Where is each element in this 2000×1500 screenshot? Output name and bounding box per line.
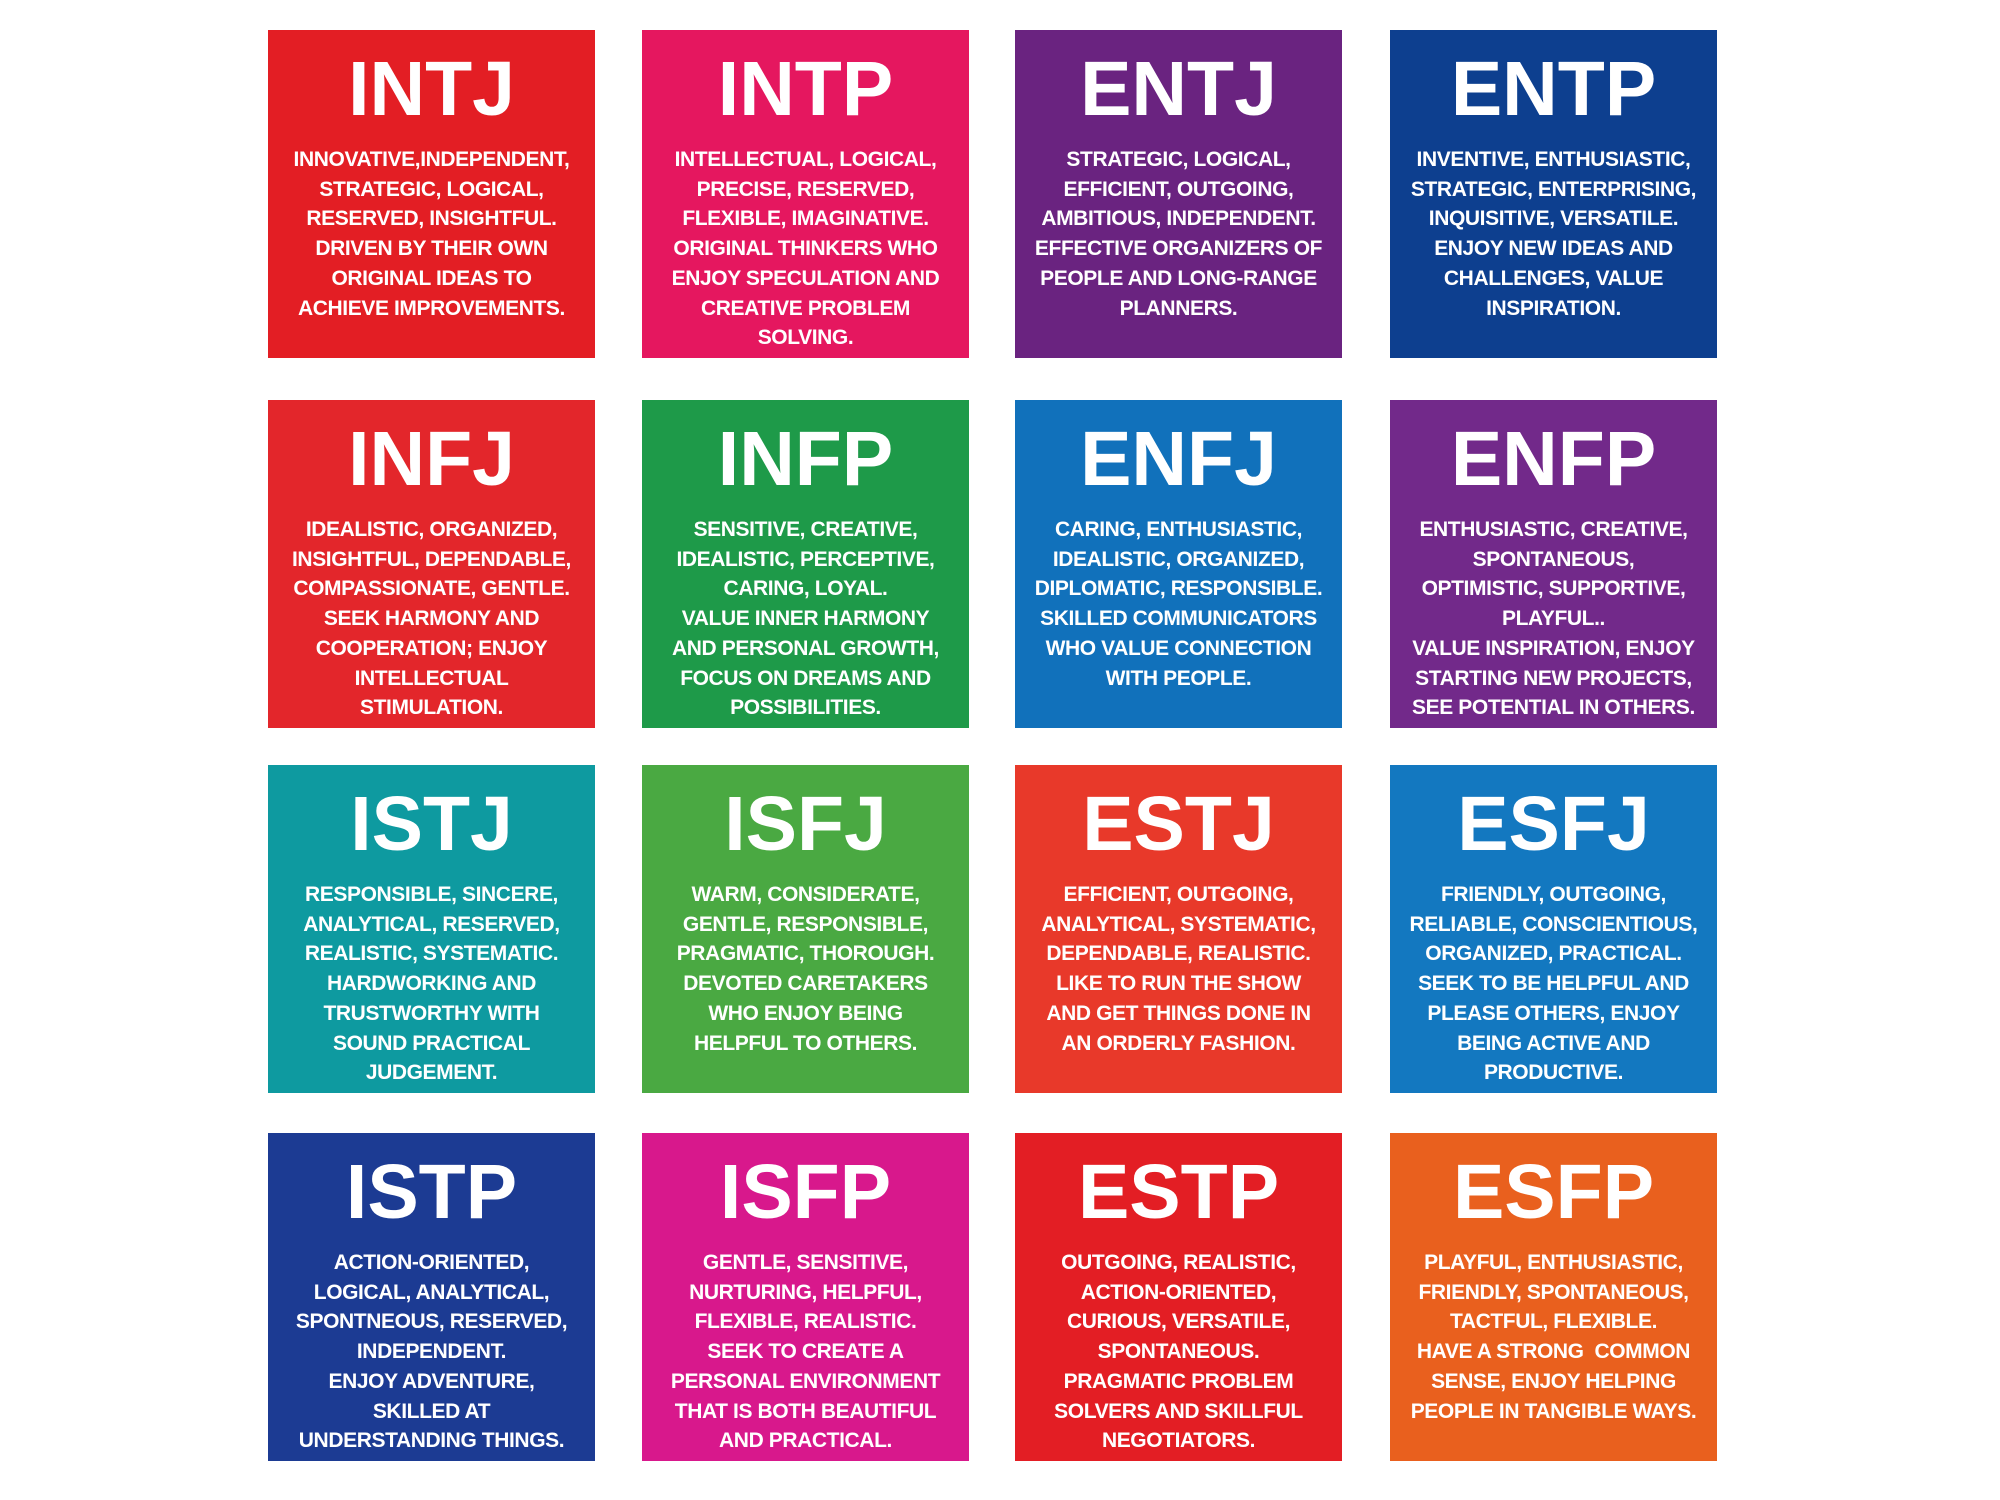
panel: INTP bbox=[642, 30, 969, 358]
heading: ISFP: ISFP bbox=[720, 1149, 891, 1235]
heading: ISTP: ISTP bbox=[346, 1149, 517, 1235]
text: ESTJ description: EFFICIENT, OUTGOING, bbox=[1063, 883, 1294, 906]
panel: ENFP bbox=[1390, 400, 1717, 728]
text: INTJ description: STRATEGIC, LOGICAL, bbox=[319, 178, 544, 201]
text: ISFJ description: GENTLE, RESPONSIBLE, bbox=[683, 913, 928, 936]
heading: ISTJ: ISTJ bbox=[350, 781, 513, 867]
text: ISTJ description: JUDGEMENT. bbox=[366, 1061, 497, 1084]
text: ISFJ description: WHO ENJOY BEING bbox=[708, 1002, 903, 1025]
text: INTP description: CREATIVE PROBLEM bbox=[701, 297, 910, 320]
text: ENTJ description: EFFICIENT, OUTGOING, bbox=[1063, 178, 1294, 201]
text: ESTP description bbox=[1054, 1251, 1303, 1452]
text: ESTJ description: LIKE TO RUN THE SHOW bbox=[1056, 972, 1301, 995]
text: ENFJ description: SKILLED COMMUNICATORS bbox=[1040, 607, 1317, 630]
text: INFP description: CARING, LOYAL. bbox=[724, 577, 887, 600]
text: ESTP description: NEGOTIATORS. bbox=[1102, 1429, 1255, 1452]
text: ISFP description: NURTURING, HELPFUL, bbox=[689, 1281, 922, 1304]
text: ISTJ description: ANALYTICAL, RESERVED, bbox=[303, 913, 560, 936]
text: ENFJ description: IDEALISTIC, ORGANIZED, bbox=[1053, 548, 1304, 571]
text: ENTJ description: STRATEGIC, LOGICAL, bbox=[1066, 148, 1291, 171]
heading: ESFP: ESFP bbox=[1453, 1149, 1654, 1235]
text: ENTJ description bbox=[1035, 148, 1322, 320]
panel: INFP bbox=[642, 400, 969, 728]
text: ISTP description: SKILLED AT bbox=[373, 1400, 490, 1423]
text: ENFJ description: WITH PEOPLE. bbox=[1106, 667, 1251, 690]
text: ESFP description bbox=[1411, 1251, 1696, 1423]
text: ENTP description: CHALLENGES, VALUE bbox=[1444, 267, 1663, 290]
text: ISTJ description: RESPONSIBLE, SINCERE, bbox=[305, 883, 558, 906]
text: ENTP description: ENJOY NEW IDEAS AND bbox=[1434, 237, 1673, 260]
text: ENTJ description: EFFECTIVE ORGANIZERS OF bbox=[1035, 237, 1322, 260]
text: ESTP description: SPONTANEOUS. bbox=[1098, 1340, 1259, 1363]
text: ENFJ description: WHO VALUE CONNECTION bbox=[1046, 637, 1311, 660]
text: INTJ description: DRIVEN BY THEIR OWN bbox=[315, 237, 548, 260]
text: ENFP description: VALUE INSPIRATION, ENJOY bbox=[1412, 637, 1695, 660]
text: ENTJ description: AMBITIOUS, INDEPENDENT. bbox=[1041, 207, 1316, 230]
text: ESFJ description: BEING ACTIVE AND bbox=[1457, 1032, 1650, 1055]
text: INTJ description: RESERVED, INSIGHTFUL. bbox=[306, 207, 557, 230]
text: INTP description: ORIGINAL THINKERS WHO bbox=[673, 237, 938, 260]
text: ISFJ description: HELPFUL TO OTHERS. bbox=[694, 1032, 917, 1055]
text: INTP description: SOLVING. bbox=[758, 326, 853, 349]
text: ESFP description: PLAYFUL, ENTHUSIASTIC, bbox=[1424, 1251, 1683, 1274]
heading: INTP: INTP bbox=[718, 46, 893, 132]
text: INTJ description: INNOVATIVE,INDEPENDENT, bbox=[294, 148, 569, 171]
text: ISTP description: ENJOY ADVENTURE, bbox=[328, 1370, 534, 1393]
text: ESTJ description bbox=[1041, 883, 1316, 1055]
text: ESTJ description: AND GET THINGS DONE IN bbox=[1046, 1002, 1311, 1025]
text: ENFJ description: CARING, ENTHUSIASTIC, bbox=[1055, 518, 1302, 541]
text: ISFP description: SEEK TO CREATE A bbox=[707, 1340, 904, 1363]
text: INFP description: AND PERSONAL GROWTH, bbox=[672, 637, 939, 660]
panel: ISTJ bbox=[268, 765, 595, 1093]
text: ESFJ description: SEEK TO BE HELPFUL AND bbox=[1418, 972, 1689, 995]
text: ENFJ description bbox=[1035, 518, 1322, 690]
text: ESTJ description: ANALYTICAL, SYSTEMATIC, bbox=[1041, 913, 1316, 936]
panel: ESFJ bbox=[1390, 765, 1717, 1093]
text: ESFJ description: PLEASE OTHERS, ENJOY bbox=[1427, 1002, 1680, 1025]
panel: ENTP bbox=[1390, 30, 1717, 358]
text: ENFP description: PLAYFUL.. bbox=[1502, 607, 1605, 630]
text: ISFP description: FLEXIBLE, REALISTIC. bbox=[695, 1310, 916, 1333]
text: ENTP description bbox=[1411, 148, 1696, 320]
panel: INFJ bbox=[268, 400, 595, 728]
text: ESFJ description: ORGANIZED, PRACTICAL. bbox=[1425, 942, 1682, 965]
heading: ENFP: ENFP bbox=[1451, 416, 1656, 502]
heading: ISFJ: ISFJ bbox=[724, 781, 887, 867]
text: ISFP description: AND PRACTICAL. bbox=[719, 1429, 892, 1452]
text: ENFP description: OPTIMISTIC, SUPPORTIVE, bbox=[1422, 577, 1685, 600]
heading: ENTJ: ENTJ bbox=[1080, 46, 1277, 132]
text: ESFP description: TACTFUL, FLEXIBLE. bbox=[1450, 1310, 1657, 1333]
text: ISTP description: ACTION-ORIENTED, bbox=[334, 1251, 529, 1274]
text: ESTJ description: AN ORDERLY FASHION. bbox=[1062, 1032, 1295, 1055]
text: ISFP description: GENTLE, SENSITIVE, bbox=[703, 1251, 908, 1274]
text: ISTJ description: HARDWORKING AND bbox=[327, 972, 536, 995]
panel: ESFP bbox=[1390, 1133, 1717, 1461]
text: ISTP description: UNDERSTANDING THINGS. bbox=[299, 1429, 564, 1452]
panel: ESTJ bbox=[1015, 765, 1342, 1093]
text: INFP description: VALUE INNER HARMONY bbox=[682, 607, 929, 630]
text: ESTP description: CURIOUS, VERSATILE, bbox=[1067, 1310, 1290, 1333]
text: ENFJ description: DIPLOMATIC, RESPONSIBLE. bbox=[1035, 577, 1322, 600]
text: INTP description: INTELLECTUAL, LOGICAL, bbox=[675, 148, 936, 171]
heading: ESTP: ESTP bbox=[1078, 1149, 1279, 1235]
text: ISTJ description: TRUSTWORTHY WITH bbox=[323, 1002, 540, 1025]
panel: ESTP bbox=[1015, 1133, 1342, 1461]
text: INFP description: POSSIBILITIES. bbox=[730, 696, 881, 719]
text: ENFP description: STARTING NEW PROJECTS, bbox=[1415, 667, 1692, 690]
text: ISFP description: PERSONAL ENVIRONMENT bbox=[671, 1370, 940, 1393]
text: INFP description bbox=[672, 518, 939, 719]
text: INFP description: FOCUS ON DREAMS AND bbox=[680, 667, 931, 690]
text: ESTP description: SOLVERS AND SKILLFUL bbox=[1054, 1400, 1303, 1423]
text: INFP description: IDEALISTIC, PERCEPTIVE, bbox=[676, 548, 934, 571]
text: INFJ description: COMPASSIONATE, GENTLE. bbox=[293, 577, 570, 600]
text: INFJ description: STIMULATION. bbox=[360, 696, 503, 719]
text: ESTP description: ACTION-ORIENTED, bbox=[1081, 1281, 1276, 1304]
text: INFP description: SENSITIVE, CREATIVE, bbox=[694, 518, 917, 541]
panel: ISTP bbox=[268, 1133, 595, 1461]
text: ISFJ description: WARM, CONSIDERATE, bbox=[691, 883, 920, 906]
heading: INFP: INFP bbox=[718, 416, 893, 502]
text: ESFP description: HAVE A STRONG COMMON bbox=[1417, 1340, 1690, 1363]
panel: ENTJ bbox=[1015, 30, 1342, 358]
text: INTP description: FLEXIBLE, IMAGINATIVE. bbox=[682, 207, 929, 230]
text: INTP description bbox=[672, 148, 939, 349]
heading: INFJ: INFJ bbox=[348, 416, 515, 502]
text: ENTP description: STRATEGIC, ENTERPRISING, bbox=[1411, 178, 1696, 201]
text: ENTJ description: PEOPLE AND LONG-RANGE bbox=[1040, 267, 1317, 290]
text: ESFJ description bbox=[1410, 883, 1697, 1084]
text: INFJ description: SEEK HARMONY AND bbox=[324, 607, 539, 630]
text: INFJ description: COOPERATION; ENJOY bbox=[316, 637, 547, 660]
text: ISFP description bbox=[671, 1251, 940, 1452]
panel: ISFP bbox=[642, 1133, 969, 1461]
panel: INTJ bbox=[268, 30, 595, 358]
heading: ENTP: ENTP bbox=[1451, 46, 1656, 132]
text: ENTP description: INQUISITIVE, VERSATILE. bbox=[1429, 207, 1678, 230]
text: INFJ description: IDEALISTIC, ORGANIZED, bbox=[306, 518, 557, 541]
text: ENTP description: INSPIRATION. bbox=[1486, 297, 1621, 320]
text: ENFP description: SPONTANEOUS, bbox=[1473, 548, 1634, 571]
text: ENFP description: ENTHUSIASTIC, CREATIVE, bbox=[1419, 518, 1688, 541]
text: ESTP description: PRAGMATIC PROBLEM bbox=[1064, 1370, 1293, 1393]
panel: ISFJ bbox=[642, 765, 969, 1093]
text: INTJ description bbox=[294, 148, 569, 320]
text: ISTJ description bbox=[303, 883, 560, 1084]
text: INTP description: ENJOY SPECULATION AND bbox=[672, 267, 939, 290]
text: ESTP description: OUTGOING, REALISTIC, bbox=[1061, 1251, 1296, 1274]
text: INFJ description bbox=[292, 518, 571, 719]
text: ESFP description: PEOPLE IN TANGIBLE WAYS. bbox=[1411, 1400, 1696, 1423]
text: ISTJ description: REALISTIC, SYSTEMATIC. bbox=[305, 942, 558, 965]
text: ESFJ description: FRIENDLY, OUTGOING, bbox=[1441, 883, 1666, 906]
text: ISFJ description: DEVOTED CARETAKERS bbox=[683, 972, 928, 995]
heading: ENFJ: ENFJ bbox=[1080, 416, 1277, 502]
text: ENFP description bbox=[1412, 518, 1695, 719]
text: ESFP description: FRIENDLY, SPONTANEOUS, bbox=[1418, 1281, 1689, 1304]
text: INTJ description: ACHIEVE IMPROVEMENTS. bbox=[298, 297, 565, 320]
text: INFJ description: INSIGHTFUL, DEPENDABLE, bbox=[292, 548, 571, 571]
heading: ESFJ: ESFJ bbox=[1457, 781, 1650, 867]
text: ISTJ description: SOUND PRACTICAL bbox=[333, 1032, 530, 1055]
text: ISTP description bbox=[296, 1251, 567, 1452]
text: ESFP description: SENSE, ENJOY HELPING bbox=[1431, 1370, 1676, 1393]
text: ESFJ description: PRODUCTIVE. bbox=[1484, 1061, 1623, 1084]
panel: ENFJ bbox=[1015, 400, 1342, 728]
text: ENFP description: SEE POTENTIAL IN OTHERS. bbox=[1412, 696, 1695, 719]
text: ISTP description: INDEPENDENT. bbox=[357, 1340, 506, 1363]
heading: ESTJ: ESTJ bbox=[1082, 781, 1275, 867]
text: INTP description: PRECISE, RESERVED, bbox=[697, 178, 914, 201]
text: ESFJ description: RELIABLE, CONSCIENTIOUS, bbox=[1410, 913, 1697, 936]
heading: INTJ: INTJ bbox=[348, 46, 515, 132]
text: ISFP description: THAT IS BOTH BEAUTIFUL bbox=[675, 1400, 936, 1423]
text: INTJ description: ORIGINAL IDEAS TO bbox=[331, 267, 532, 290]
text: ISTP description: SPONTNEOUS, RESERVED, bbox=[296, 1310, 567, 1333]
text: INFJ description: INTELLECTUAL bbox=[355, 667, 508, 690]
text: ENTJ description: PLANNERS. bbox=[1120, 297, 1237, 320]
text: ESTJ description: DEPENDABLE, REALISTIC. bbox=[1046, 942, 1311, 965]
text: ISTP description: LOGICAL, ANALYTICAL, bbox=[314, 1281, 549, 1304]
text: ISFJ description: PRAGMATIC, THOROUGH. bbox=[677, 942, 934, 965]
text: ISFJ description bbox=[677, 883, 934, 1055]
text: ENTP description: INVENTIVE, ENTHUSIASTIC, bbox=[1417, 148, 1690, 171]
